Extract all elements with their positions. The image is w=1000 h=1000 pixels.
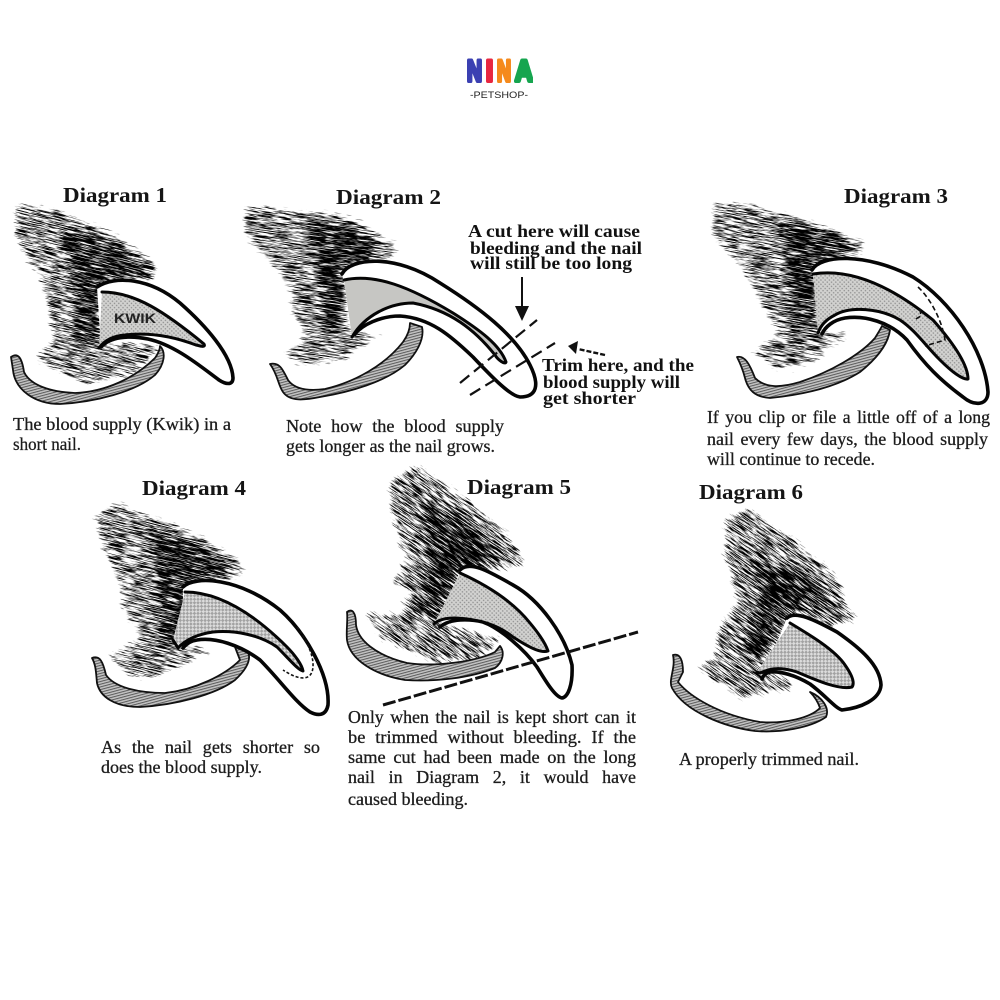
caption: diagram 1 bbox=[13, 414, 231, 454]
caption: diagram 5: caused bleeding. bbox=[348, 789, 468, 809]
caption: diagram 5: nail in Diagram 2, it would have bbox=[348, 767, 636, 787]
cut line: bleeding bbox=[460, 320, 537, 383]
callout: trim here: Trim here, and the bbox=[542, 355, 694, 375]
caption: diagram 2: Note how the blood supply bbox=[286, 416, 504, 436]
dashed receding outline: diagram 3 bbox=[914, 287, 945, 346]
caption: diagram 2: gets longer as the nail grows. bbox=[286, 436, 495, 456]
caption: diagram 5: be trimmed without bleeding. If the bbox=[348, 727, 636, 747]
logo wordmark NINA: N bbox=[497, 55, 511, 88]
caption: diagram 5: Only when the nail is kept short can it bbox=[348, 707, 636, 727]
fur: diagram 2 bbox=[218, 183, 420, 390]
heading: diagram 5: Diagram 5 bbox=[467, 475, 571, 499]
callout: cut here: will still be too long bbox=[470, 253, 632, 273]
heading: diagram 3: Diagram 3 bbox=[844, 184, 948, 208]
toe pad: diagram 2 bbox=[270, 323, 423, 399]
callout: trim here: get shorter bbox=[543, 388, 636, 408]
logo wordmark NINA bbox=[467, 55, 533, 88]
panel: diagram 1 bbox=[0, 163, 233, 454]
quick: diagram 1 bbox=[99, 292, 204, 348]
fur: diagram 4 bbox=[50, 464, 287, 716]
nail: diagram 6 bbox=[762, 615, 881, 710]
callout: cut here: bleeding and the nail bbox=[470, 238, 642, 258]
arrow: cut here bbox=[515, 277, 529, 321]
fur: diagram 5 bbox=[267, 384, 625, 745]
caption: diagram 5 bbox=[348, 707, 636, 809]
callout: trim here: blood supply will bbox=[543, 372, 680, 392]
logo tagline: -PETSHOP- bbox=[470, 90, 528, 101]
caption: diagram 1: The blood supply (Kwik) in a bbox=[13, 414, 231, 434]
callout: cut here: A cut here will cause bbox=[468, 221, 640, 241]
caption: diagram 6: A properly trimmed nail. bbox=[679, 749, 859, 769]
caption: diagram 1: short nail. bbox=[13, 434, 81, 454]
toe pad: diagram 4 bbox=[92, 647, 249, 707]
arrow: trim here bbox=[568, 341, 605, 355]
panel: diagram 5 bbox=[267, 384, 638, 809]
heading: diagram 4: Diagram 4 bbox=[142, 476, 247, 500]
fur: diagram 3 bbox=[681, 173, 897, 399]
quick: diagram 2 bbox=[344, 278, 506, 363]
caption: diagram 3 bbox=[707, 407, 990, 469]
nail: diagram 3 bbox=[812, 258, 988, 403]
cut line: trim bbox=[470, 343, 555, 395]
nail: diagram 5 bbox=[440, 566, 572, 698]
caption: diagram 2 bbox=[286, 416, 504, 456]
logo: Nina Petshop bbox=[467, 55, 533, 101]
heading: diagram 1: Diagram 1 bbox=[63, 183, 167, 207]
quick: diagram 6 bbox=[757, 623, 853, 688]
panel: diagram 4 bbox=[50, 464, 328, 777]
caption: diagram 5: same cut had been made on the long bbox=[348, 747, 636, 767]
callout: cut here bbox=[468, 221, 642, 273]
toe pad: diagram 3 bbox=[737, 326, 890, 398]
fur: diagram 1 bbox=[0, 163, 214, 425]
nail: diagram 2 bbox=[342, 261, 536, 397]
cut line: diagram 5 bbox=[383, 632, 638, 705]
label: KWIK: KWIK bbox=[114, 310, 156, 326]
panel: diagram 2 bbox=[218, 183, 694, 456]
quick: diagram 3 bbox=[813, 273, 968, 379]
toe pad: diagram 6 bbox=[671, 655, 827, 731]
nail: diagram 4 bbox=[183, 581, 328, 714]
heading: diagram 2: Diagram 2 bbox=[336, 185, 441, 209]
panel: diagram 6 bbox=[599, 426, 953, 781]
heading: diagram 6: Diagram 6 bbox=[699, 480, 803, 504]
caption: diagram 3: If you clip or file a little off of a long bbox=[707, 407, 990, 427]
caption: diagram 3: will continue to recede. bbox=[707, 449, 875, 469]
logo wordmark NINA: A bbox=[515, 55, 533, 88]
dashed receding outline: diagram 4 bbox=[283, 627, 313, 678]
caption: diagram 4: As the nail gets shorter so bbox=[101, 737, 320, 757]
quick: diagram 5 bbox=[434, 573, 548, 652]
logo wordmark NINA: I bbox=[486, 55, 493, 88]
caption: diagram 4: does the blood supply. bbox=[101, 757, 262, 777]
toe pad: diagram 5 bbox=[347, 611, 503, 680]
toe pad: diagram 1 bbox=[11, 346, 164, 404]
logo wordmark NINA: N bbox=[467, 55, 482, 88]
caption: diagram 4 bbox=[101, 737, 320, 777]
callout: trim here bbox=[542, 355, 694, 408]
nail: diagram 1 bbox=[97, 280, 233, 384]
caption: diagram 3: nail every few days, the blood supply bbox=[707, 429, 988, 449]
quick: diagram 4 bbox=[173, 592, 303, 671]
panel: diagram 3 bbox=[681, 173, 990, 469]
fur: diagram 6 bbox=[599, 426, 953, 781]
